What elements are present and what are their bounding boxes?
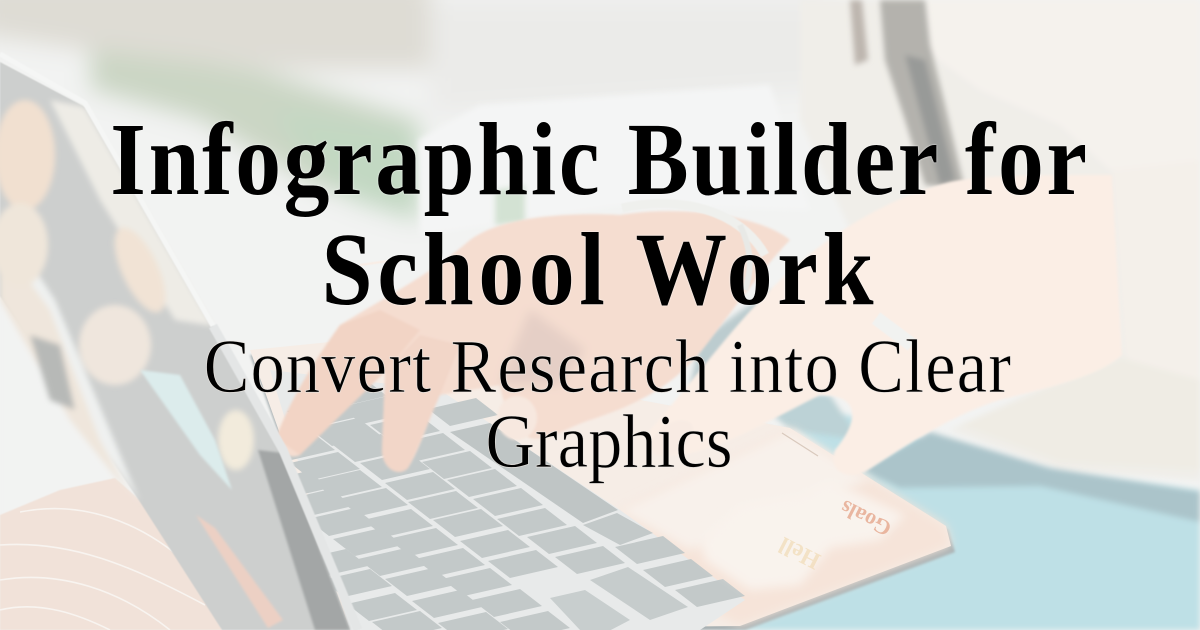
white object behind hands [418, 85, 810, 235]
title second line: School Work [322, 212, 878, 327]
laptop deck [250, 342, 955, 630]
subtitle: Convert Research into Clear [204, 325, 1012, 409]
keyboard keys [260, 379, 745, 630]
right hand [644, 175, 1122, 475]
trackpad edge line [782, 433, 818, 456]
left hand [276, 211, 790, 472]
bracelets and ring [360, 203, 912, 345]
laptop lid with floral print [0, 54, 358, 630]
subtitle second line: Graphics [486, 400, 732, 484]
thigh with torn jeans threads [0, 478, 222, 630]
title: Infographic Builder for [110, 102, 1090, 217]
sticker on laptop: Hell [775, 531, 825, 574]
hair [850, 0, 965, 190]
jeans [690, 290, 1200, 630]
sticker on laptop [700, 480, 905, 590]
sweater [800, 0, 1200, 480]
sticker on laptop: Goals [836, 495, 895, 542]
